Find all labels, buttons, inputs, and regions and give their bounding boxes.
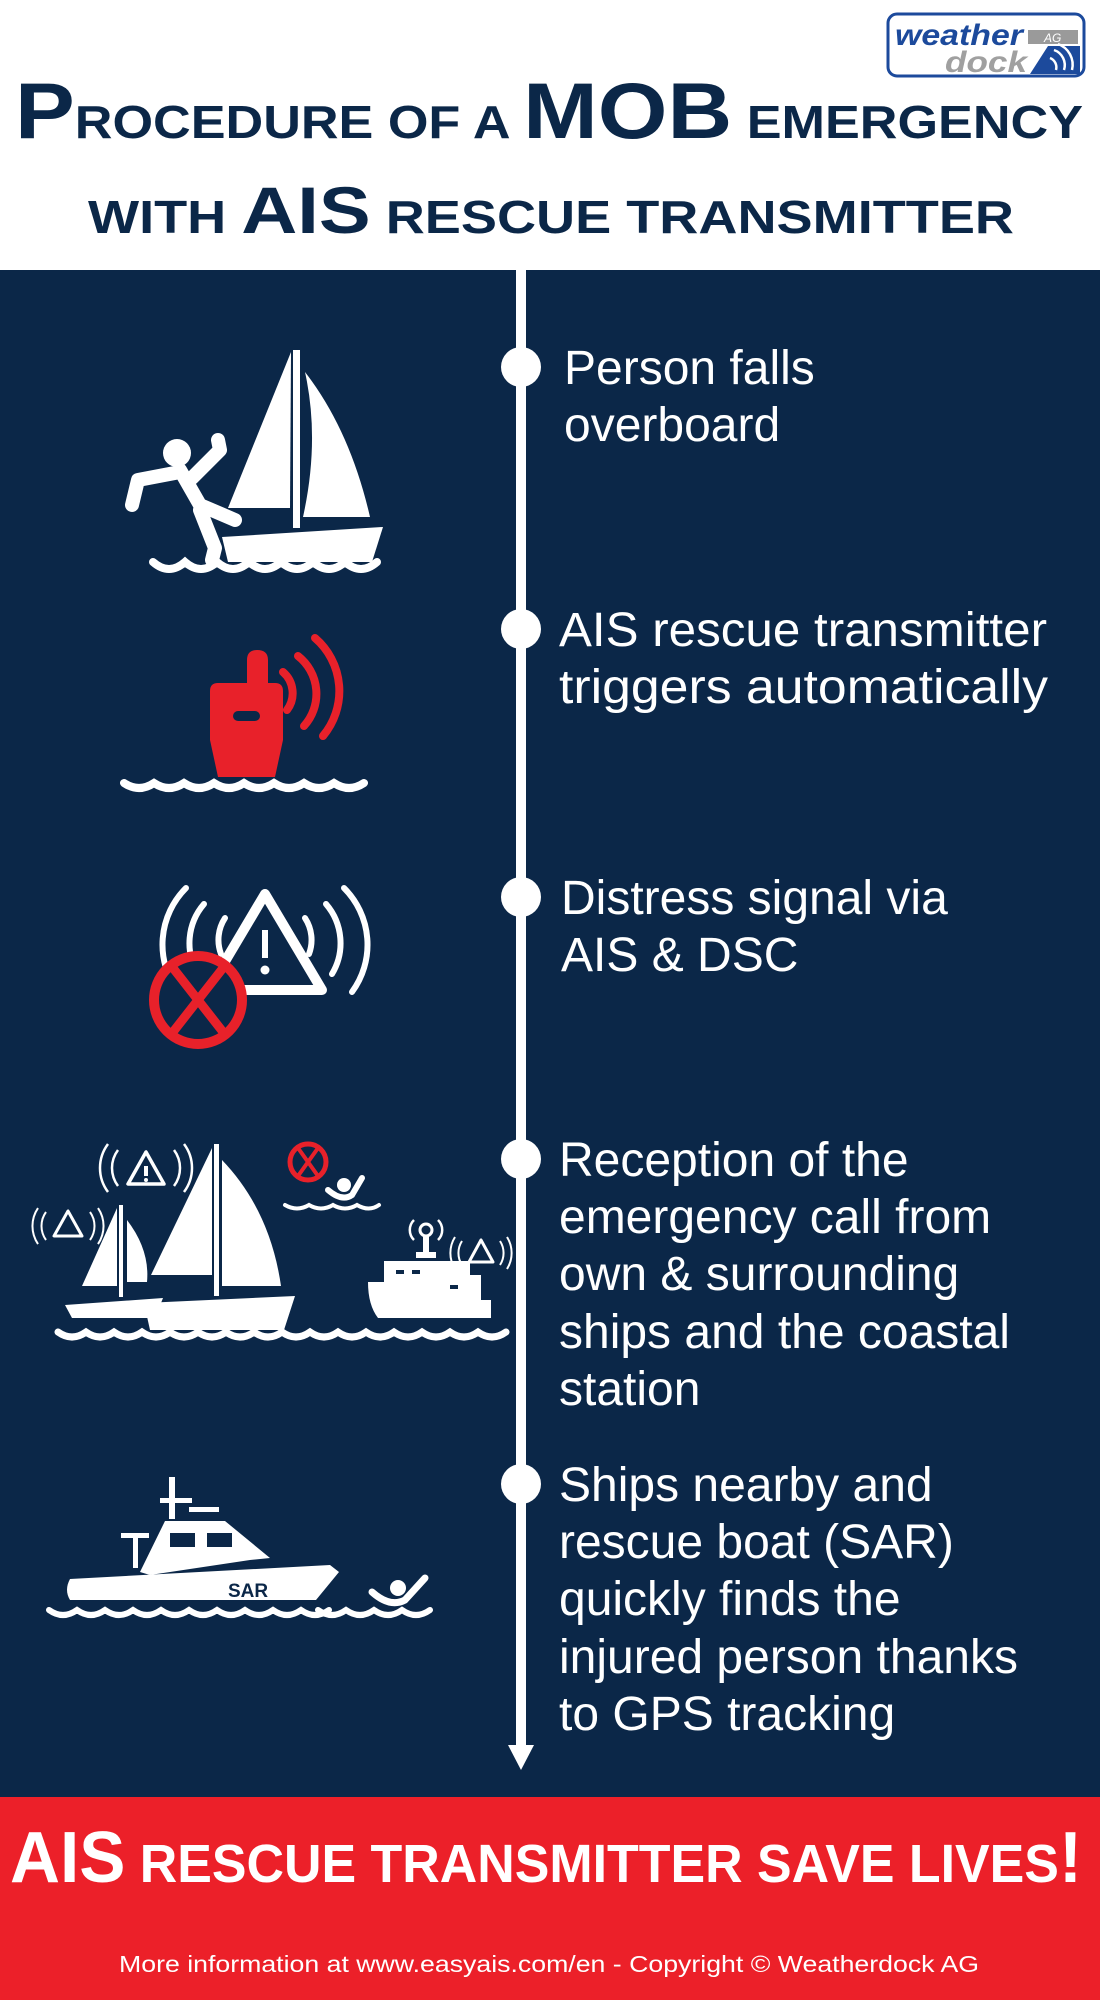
text: step 1: overboard	[564, 399, 780, 452]
text: step 4: station	[559, 1363, 700, 1416]
logo: weatherdock: AG	[1043, 31, 1061, 45]
text: step 5: rescue boat (SAR)	[559, 1516, 954, 1569]
title	[15, 66, 1083, 247]
text: step 5: quickly finds the	[559, 1573, 901, 1626]
text: step 5: Ships nearby and	[559, 1459, 933, 1512]
logo: weatherdock	[888, 14, 1084, 79]
logo: weatherdock: weather	[895, 19, 1026, 52]
title: WITH AIS RESCUE TRANSMITTER	[88, 173, 1014, 247]
step texts	[559, 342, 1048, 1741]
footer text: More information at www.easyais.com/en - Copyright © Weatherdock AG	[119, 1951, 979, 1977]
text: step 5: injured person thanks	[559, 1631, 1018, 1684]
logo: weatherdock: dock	[945, 46, 1029, 79]
timeline arrow	[501, 270, 541, 1770]
panel: timeline background	[0, 270, 1100, 1798]
icon: person falling off sailboat	[132, 350, 383, 569]
text: step 5: to GPS tracking	[559, 1688, 895, 1741]
text: step 4: Reception of the	[559, 1134, 909, 1187]
icon: SAR rescue boat and swimmer	[49, 1477, 430, 1615]
panel: red banner	[0, 1797, 1100, 2000]
icon: ships receiving emergency call	[32, 1144, 512, 1337]
text: step 1: Person falls	[564, 342, 815, 395]
icon: distress signal warning	[154, 888, 368, 1044]
text: step 2: AIS rescue transmitter	[559, 604, 1047, 657]
icon: red AIS transmitter in water	[124, 638, 364, 788]
title: PROCEDURE OF A MOB EMERGENCY	[15, 66, 1083, 155]
text: step 4: emergency call from	[559, 1191, 991, 1244]
banner slogan: AIS RESCUE TRANSMITTER SAVE LIVES!	[10, 1818, 1082, 1898]
text: step 3: AIS & DSC	[561, 929, 798, 982]
text: step 4: own & surrounding	[559, 1248, 959, 1301]
icon: SAR rescue boat and swimmer: SAR	[228, 1581, 268, 1602]
text: step 2 line 2: triggers automatically	[559, 661, 1048, 714]
text: step 4: ships and the coastal	[559, 1306, 1010, 1359]
text: step 3: Distress signal via	[561, 872, 948, 925]
